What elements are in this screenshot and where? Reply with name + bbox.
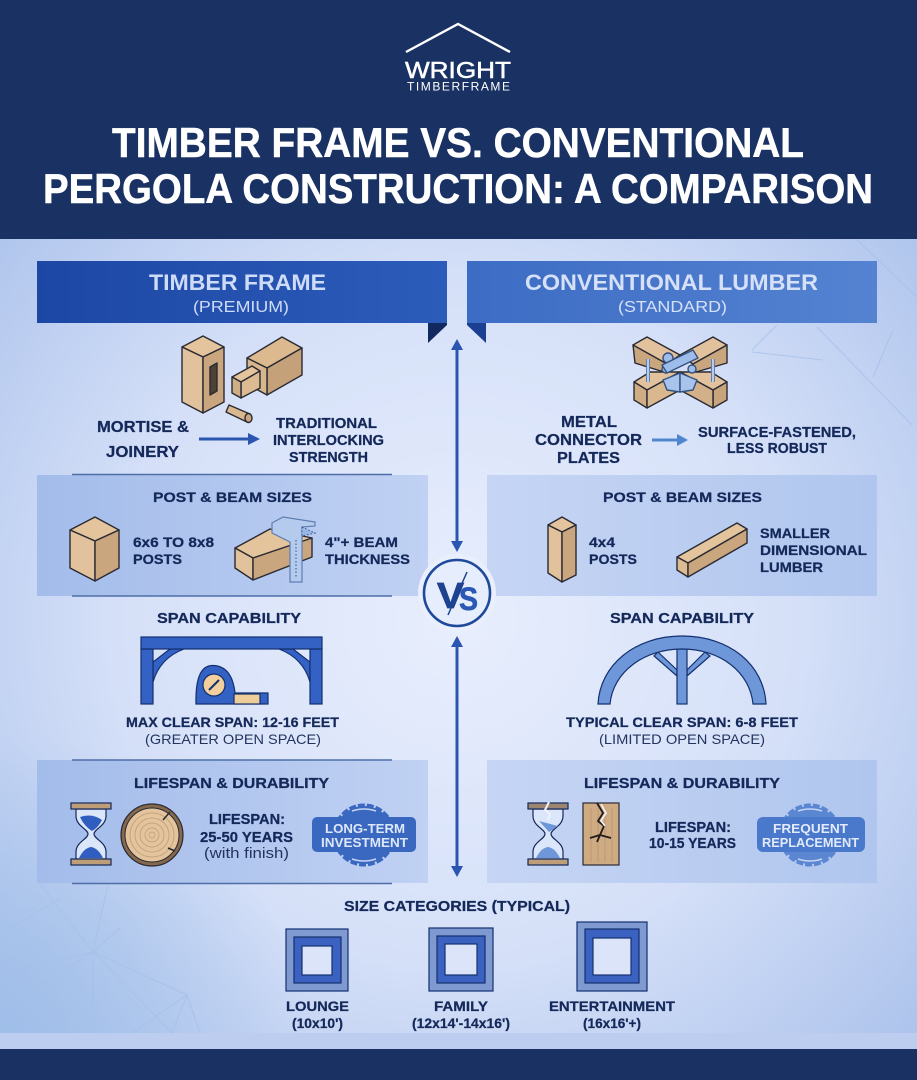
section: conventional span capability: (LIMITED OPEN SPACE) bbox=[599, 731, 765, 747]
icon: tape measure bbox=[196, 665, 268, 704]
text: surface-fastened, less robust: SURFACE-FASTENED, bbox=[698, 425, 856, 441]
size: entertainment bbox=[549, 922, 675, 1031]
background bbox=[0, 239, 917, 1050]
banner: timber frame bbox=[37, 261, 447, 343]
section: conventional span capability: SPAN CAPABILITY bbox=[610, 611, 754, 627]
size: lounge bbox=[286, 929, 349, 1031]
banner: conventional lumber: (STANDARD) bbox=[618, 299, 727, 316]
icon: small post bbox=[548, 517, 576, 582]
banner: conventional lumber bbox=[467, 261, 877, 343]
section: size categories bbox=[286, 898, 675, 1031]
icon: log cross-section bbox=[121, 804, 183, 866]
panel: conventional post and beam sizes: LUMBER bbox=[760, 559, 823, 575]
panel: timber post and beam sizes: POST & BEAM SIZES bbox=[153, 489, 312, 505]
text: traditional interlocking strength: STRENGTH bbox=[289, 450, 368, 466]
panel: conventional post and beam sizes: 4x4 bbox=[589, 534, 615, 550]
panel: conventional lifespan and durability: 10-15 YEARS bbox=[649, 836, 736, 852]
size: entertainment: (16x16'+) bbox=[583, 1015, 641, 1031]
logo: Wright Timberframe: WRIGHT bbox=[405, 57, 511, 83]
panel: conventional post and beam sizes: DIMENSIONAL bbox=[760, 542, 867, 558]
panel: timber lifespan and durability: (with finish) bbox=[204, 846, 289, 862]
section: conventional span capability: TYPICAL CLEAR SPAN: 6-8 FEET bbox=[566, 714, 798, 730]
size: family: FAMILY bbox=[434, 998, 489, 1014]
section: timber span capability: MAX CLEAR SPAN: 12-16 FEET bbox=[126, 714, 339, 730]
section: timber span capability: (GREATER OPEN SPACE) bbox=[145, 731, 321, 747]
icon: large post bbox=[70, 517, 119, 581]
title bbox=[43, 119, 873, 212]
section: size categories: SIZE CATEGORIES (TYPICAL) bbox=[344, 898, 570, 915]
panel: conventional lifespan and durability: LIFESPAN & DURABILITY bbox=[584, 775, 780, 792]
icon: cracked hourglass bbox=[528, 802, 568, 865]
text: metal connector plates bbox=[535, 414, 642, 467]
badge: frequent replacement bbox=[757, 805, 865, 865]
icon: roof bbox=[406, 24, 510, 52]
panel: timber post and beam sizes: 4"+ BEAM bbox=[325, 534, 398, 550]
text: metal connector plates: PLATES bbox=[557, 450, 620, 467]
badge: frequent replacement: FREQUENT bbox=[773, 821, 848, 836]
icon: conventional arch span bbox=[598, 636, 766, 704]
icon: dimensional lumber bbox=[677, 523, 747, 577]
panel: timber post and beam sizes bbox=[37, 474, 428, 596]
size: entertainment: ENTERTAINMENT bbox=[549, 998, 675, 1014]
panel: timber lifespan and durability bbox=[37, 760, 428, 884]
section: timber span capability: SPAN CAPABILITY bbox=[157, 611, 301, 627]
size: family: (12x14'-14x16') bbox=[412, 1015, 510, 1031]
vs badge bbox=[418, 554, 496, 632]
logo: Wright Timberframe: TIMBERFRAME bbox=[407, 80, 510, 94]
center arrow: top bbox=[451, 339, 463, 552]
size: lounge: (10x10') bbox=[292, 1015, 343, 1031]
banner: timber frame: TIMBER FRAME bbox=[149, 270, 326, 295]
text: mortise and joinery: JOINERY bbox=[106, 444, 180, 461]
text: metal connector plates: CONNECTOR bbox=[535, 432, 642, 449]
vs badge: V bbox=[437, 575, 464, 616]
panel: conventional post and beam sizes bbox=[487, 475, 877, 596]
icon: hourglass bbox=[71, 803, 111, 865]
panel: timber post and beam sizes: POSTS bbox=[133, 551, 182, 567]
footer band bbox=[0, 1049, 917, 1080]
badge: long-term investment bbox=[312, 805, 416, 865]
text: traditional interlocking strength bbox=[273, 416, 384, 466]
section: timber span capability bbox=[126, 611, 339, 747]
panel: conventional post and beam sizes: SMALLER bbox=[760, 525, 830, 541]
text: metal connector plates: METAL bbox=[561, 414, 617, 431]
panel: conventional post and beam sizes: POSTS bbox=[589, 551, 637, 567]
icon: mortise and tenon joint bbox=[182, 336, 302, 422]
panel: conventional post and beam sizes: POST & BEAM SIZES bbox=[603, 489, 762, 505]
badge: long-term investment: LONG-TERM bbox=[325, 821, 405, 836]
icon: cracked plank bbox=[583, 803, 619, 865]
banner: conventional lumber: CONVENTIONAL LUMBER bbox=[525, 270, 818, 295]
icon: timber frame span bbox=[141, 637, 322, 704]
panel: timber post and beam sizes: THICKNESS bbox=[325, 551, 410, 567]
panel: timber lifespan and durability: LIFESPAN: bbox=[209, 812, 285, 828]
title: TIMBER FRAME VS. CONVENTIONAL bbox=[112, 119, 804, 166]
logo: Wright Timberframe bbox=[405, 24, 511, 94]
arrow: plates to surface-fastened bbox=[652, 434, 688, 446]
banner: timber frame: (PREMIUM) bbox=[193, 299, 289, 316]
center arrow: bottom bbox=[451, 636, 463, 877]
size: lounge: LOUNGE bbox=[286, 998, 349, 1014]
section: conventional span capability bbox=[566, 611, 798, 747]
icon: metal connector joint bbox=[633, 337, 727, 408]
badge: long-term investment: INVESTMENT bbox=[321, 835, 408, 850]
panel: conventional lifespan and durability: LIFESPAN: bbox=[655, 820, 731, 836]
text: mortise and joinery bbox=[97, 419, 189, 461]
text: traditional interlocking strength: TRADITIONAL bbox=[276, 416, 377, 432]
size: family bbox=[412, 928, 510, 1031]
icon: beam with caliper bbox=[235, 517, 315, 582]
panel: timber post and beam sizes: 6x6 TO 8x8 bbox=[133, 534, 214, 550]
panel: conventional lifespan and durability bbox=[487, 760, 877, 883]
text: surface-fastened, less robust bbox=[698, 425, 856, 457]
header band bbox=[0, 0, 917, 239]
panel: timber lifespan and durability: LIFESPAN & DURABILITY bbox=[134, 775, 329, 792]
badge: frequent replacement: REPLACEMENT bbox=[762, 835, 859, 850]
panel: timber lifespan and durability: 25-50 YEARS bbox=[200, 830, 293, 846]
vs badge: S bbox=[459, 581, 478, 617]
text: traditional interlocking strength: INTERLOCKING bbox=[273, 433, 384, 449]
text: surface-fastened, less robust: LESS ROBUST bbox=[727, 441, 827, 457]
arrow: joinery to strength bbox=[199, 433, 260, 445]
text: mortise and joinery: MORTISE & bbox=[97, 419, 189, 436]
